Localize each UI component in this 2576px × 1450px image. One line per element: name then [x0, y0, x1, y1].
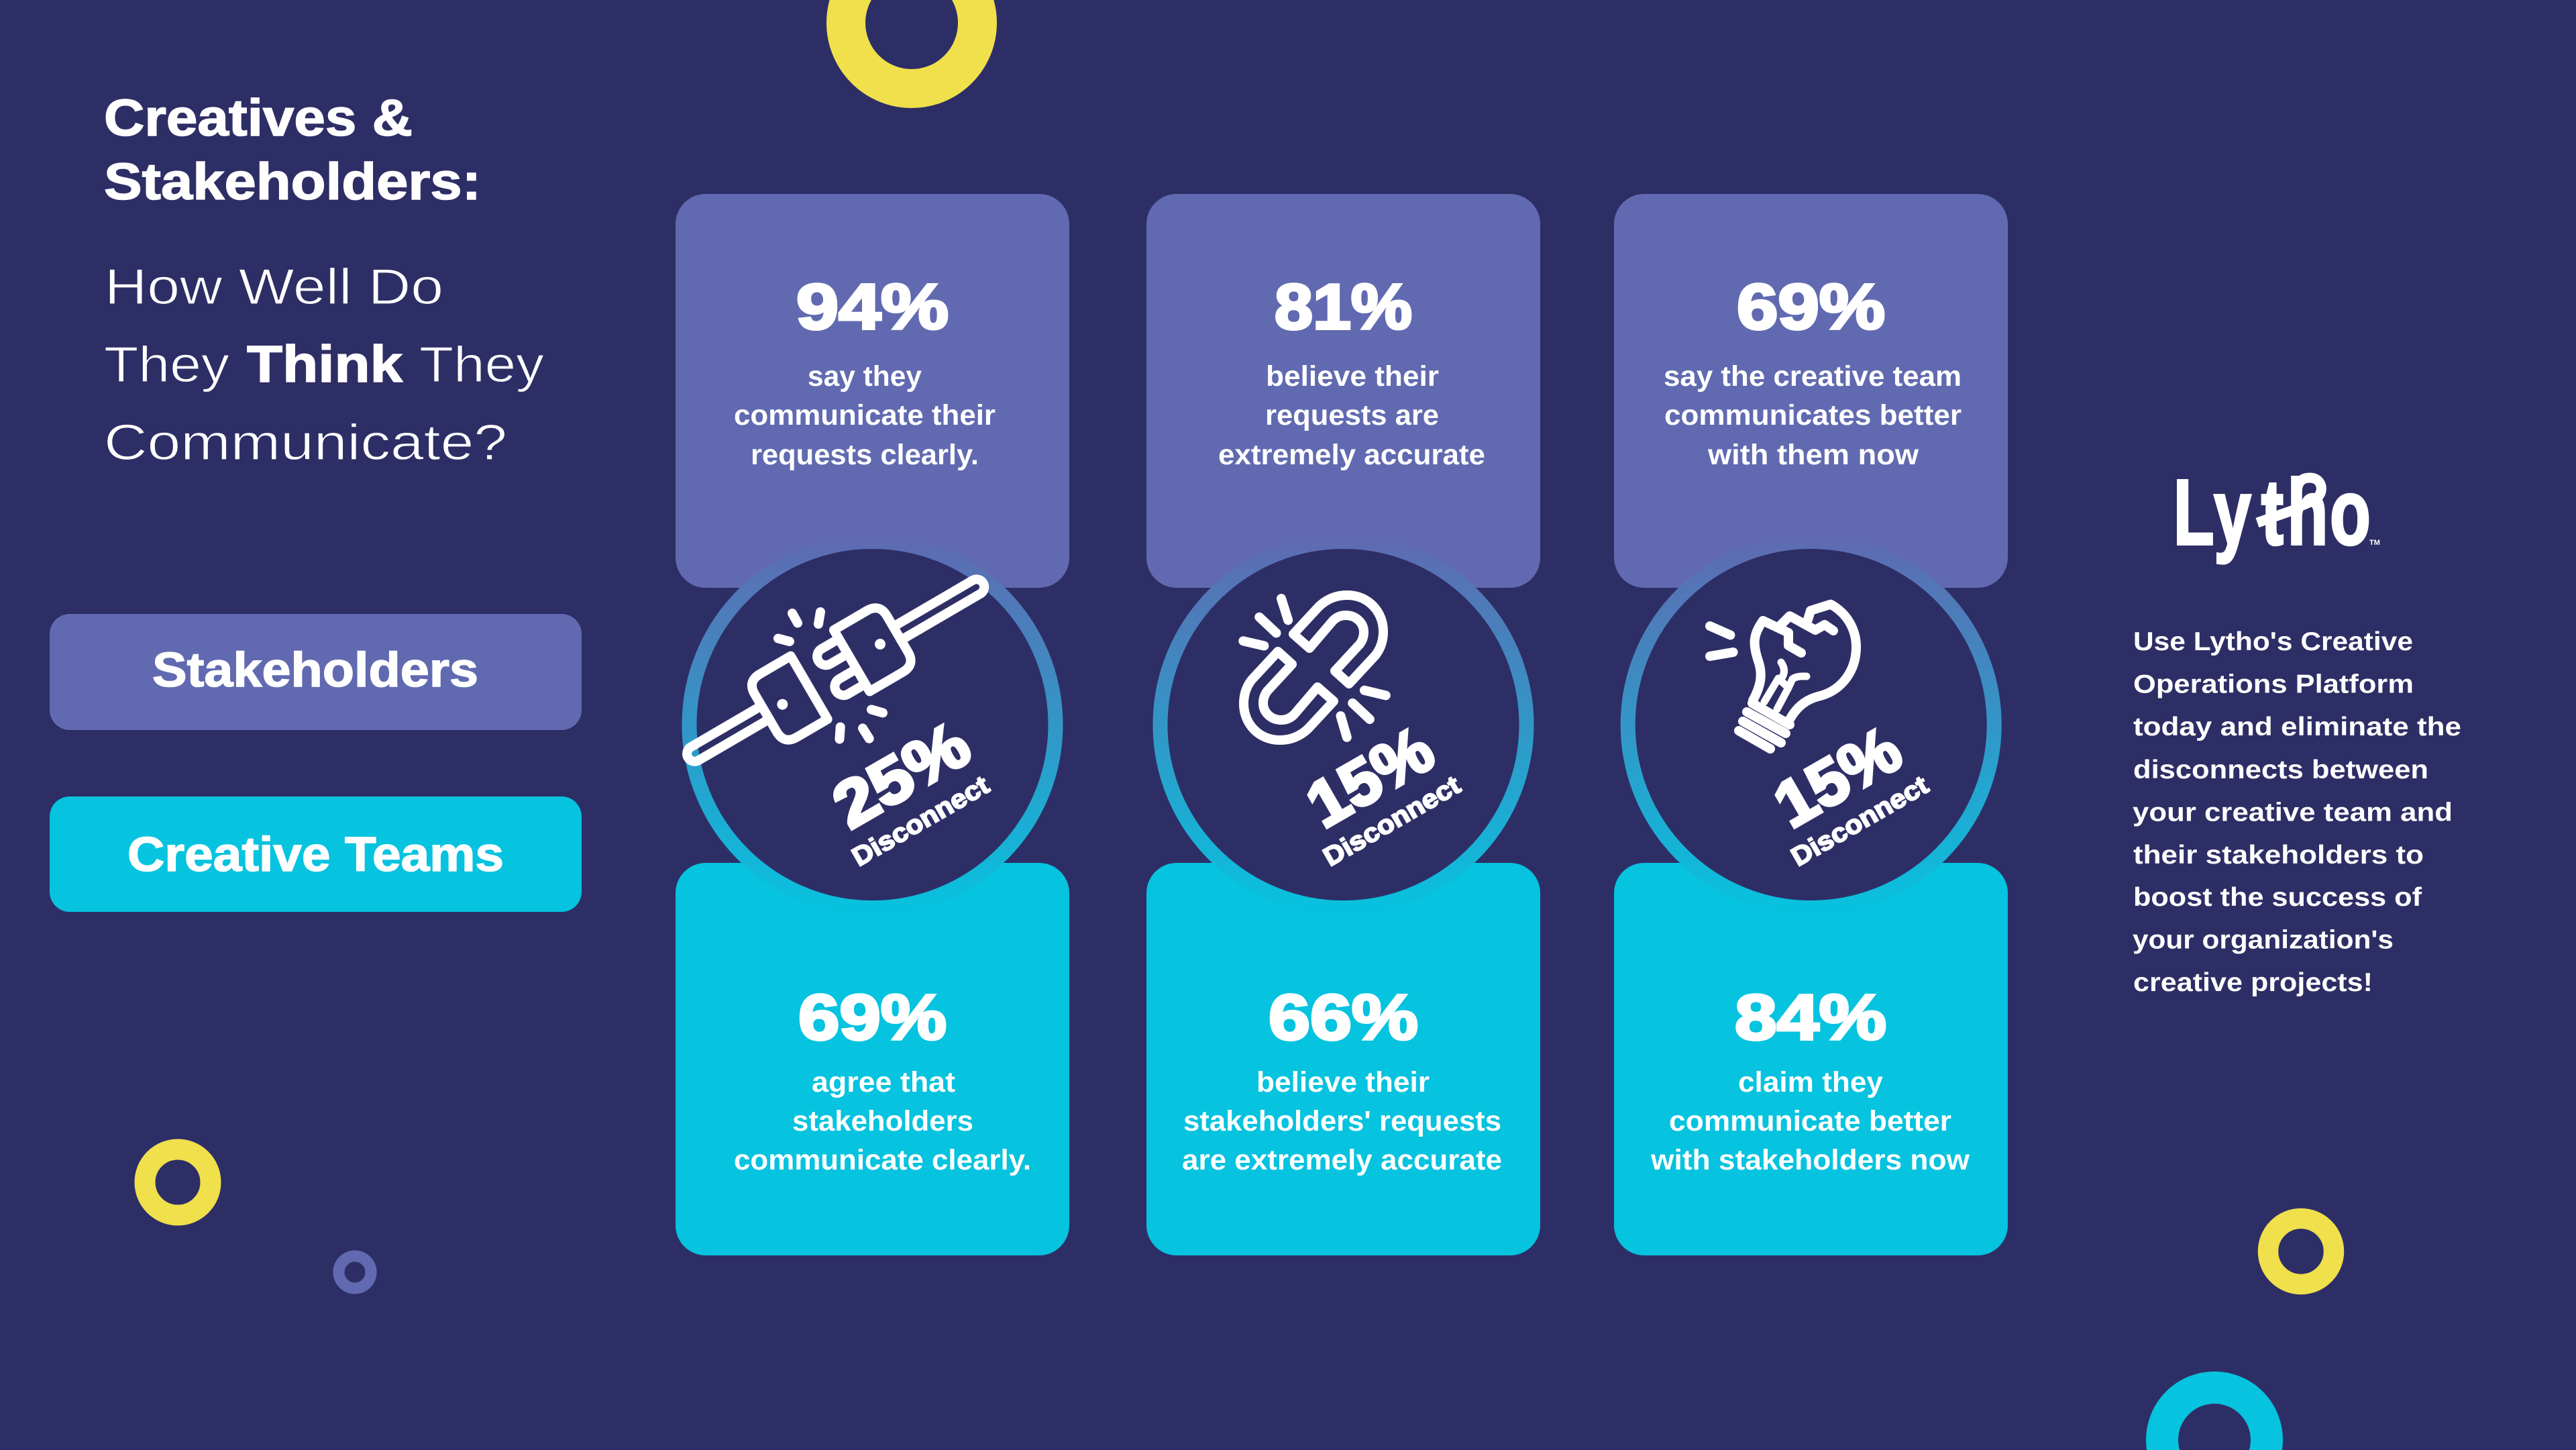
title: Stakeholders:	[104, 153, 481, 211]
panel: creative team stat 84%: 84%	[1735, 982, 1886, 1053]
call to action text: disconnects between	[2133, 756, 2428, 784]
panel: stakeholder stat 94%	[676, 194, 1069, 588]
icon: broken chain link	[1243, 595, 1386, 740]
badge: 15% disconnect, broken link	[1161, 541, 1527, 908]
call to action text: their stakeholders to	[2133, 841, 2424, 870]
stat: 15%: 15%	[1762, 713, 1913, 841]
panel: creative team stat 69%: 69%	[798, 982, 947, 1053]
decorative ring: bottom cyan	[2162, 1388, 2267, 1450]
panel: creative team stat 66%: stakeholders' requests	[1183, 1105, 1501, 1137]
panel: stakeholder stat 69%: 69%	[1737, 271, 1885, 343]
panel: stakeholder stat 81%	[1146, 194, 1540, 588]
panel: creative team stat 69%: agree that	[812, 1066, 955, 1098]
panel: stakeholder stat 94%: requests clearly.	[751, 439, 979, 471]
decorative ring: lower-left yellow	[145, 1149, 211, 1215]
panel: creative team stat 84%: claim they	[1738, 1066, 1883, 1098]
panel: creative team stat 84%: communicate better	[1669, 1105, 1951, 1137]
panel: creative team stat 69%: stakeholders	[792, 1105, 973, 1137]
call to action text: Use Lytho's Creative	[2133, 627, 2413, 656]
subtitle: How Well Do	[105, 258, 443, 315]
call to action text	[2133, 627, 2461, 997]
title	[104, 89, 481, 211]
legend: creative teams	[50, 796, 582, 912]
logo: Lytho: TM	[2369, 539, 2380, 547]
panel: creative team stat 66%	[1146, 863, 1540, 1255]
call to action text: your organization's	[2133, 926, 2394, 954]
call to action text: today and eliminate the	[2133, 713, 2461, 741]
decorative ring: small purple	[339, 1256, 371, 1288]
panel: stakeholder stat 94%: 94%	[796, 271, 949, 343]
decorative ring: lower-right yellow	[2268, 1219, 2334, 1284]
panel: stakeholder stat 81%: requests are	[1265, 399, 1439, 431]
icon: sparks around plug	[778, 612, 883, 739]
call to action text: creative projects!	[2133, 968, 2373, 997]
label: disconnect: Disconnect	[1786, 771, 1933, 872]
label: disconnect: Disconnect	[847, 771, 994, 872]
legend: stakeholders	[50, 614, 582, 730]
icon: broken light bulb	[1710, 605, 1856, 749]
decorative ring: top yellow	[846, 0, 977, 89]
panel: creative team stat 84%: with stakeholders now	[1650, 1144, 1970, 1176]
panel: stakeholder stat 81%: 81%	[1275, 271, 1412, 343]
subtitle	[104, 258, 545, 470]
call to action text: your creative team and	[2133, 798, 2453, 827]
badge: 25% disconnect	[669, 541, 1056, 908]
legend: stakeholders: Stakeholders	[152, 643, 478, 697]
panel: creative team stat 69%: communicate clearly.	[734, 1144, 1031, 1176]
panel: stakeholder stat 69%	[1614, 194, 2008, 588]
icon: unplugged cable	[669, 553, 1003, 790]
panel: stakeholder stat 94%: say they	[808, 360, 922, 393]
logo: Lytho: Lytho	[2174, 461, 2371, 564]
subtitle: Think	[247, 335, 402, 393]
panel: creative team stat 66%: believe their	[1256, 1066, 1430, 1098]
label: disconnect: Disconnect	[1319, 771, 1465, 872]
panel: creative team stat 66%: 66%	[1269, 982, 1418, 1053]
stat: 15%: 15%	[1295, 713, 1446, 841]
panel: stakeholder stat 81%: extremely accurate	[1218, 439, 1485, 471]
title: Creatives &	[104, 89, 413, 147]
panel: stakeholder stat 69%: say the creative team	[1664, 360, 1962, 393]
call to action text: boost the success of	[2133, 883, 2422, 912]
badge: 15% disconnect, broken bulb	[1628, 541, 1994, 908]
call to action text: Operations Platform	[2133, 670, 2414, 699]
panel: creative team stat 69%	[676, 863, 1069, 1255]
panel: stakeholder stat 69%: with them now	[1707, 439, 1919, 471]
panel: stakeholder stat 69%: communicates better	[1664, 399, 1962, 431]
stat: 25%: 25%	[821, 708, 982, 842]
subtitle: They	[419, 336, 545, 393]
legend: creative teams: Creative Teams	[127, 828, 504, 882]
panel: creative team stat 84%	[1614, 863, 2008, 1255]
subtitle: Communicate?	[104, 414, 507, 470]
panel: creative team stat 66%: are extremely accurate	[1182, 1144, 1502, 1176]
subtitle: They	[104, 336, 230, 393]
panel: stakeholder stat 94%: communicate their	[734, 399, 996, 431]
panel: stakeholder stat 81%: believe their	[1266, 360, 1439, 393]
